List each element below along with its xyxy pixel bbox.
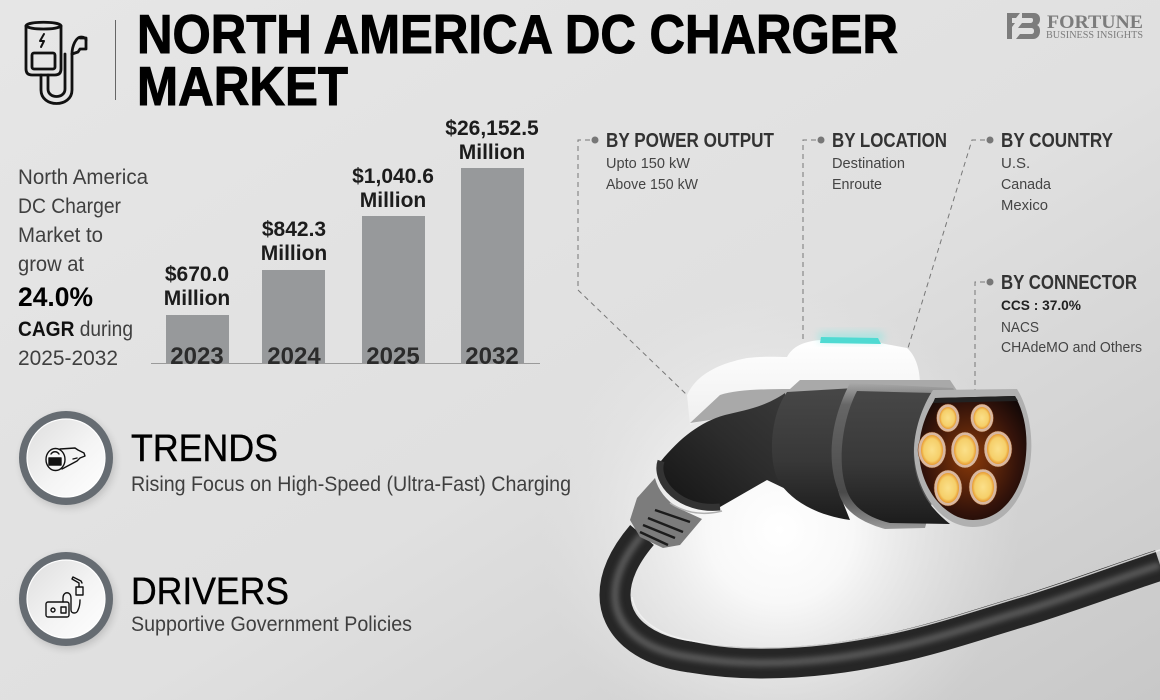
- segment: by location: Destination: [832, 155, 905, 172]
- bar: 2025: $1,040.6: [352, 165, 434, 188]
- icon: car charger button: [19, 411, 115, 508]
- segment: by location: Enroute: [832, 176, 882, 193]
- logo: Fortune Business Insights: BUSINESS INSIGHTS: [1046, 30, 1143, 41]
- text: growth statement: 2025-2032: [18, 347, 118, 370]
- bar: 2024: Million: [261, 242, 327, 265]
- icon: charger button: [19, 552, 115, 649]
- leader lines: [578, 140, 985, 395]
- segment: by connector: CCS : 37.0%: [1001, 297, 1082, 313]
- text: growth statement: 24.0%: [18, 282, 93, 312]
- ribbed strain relief: [630, 478, 702, 548]
- segment: by location: BY LOCATION: [832, 130, 947, 152]
- pins: [918, 404, 1012, 506]
- rear body: [772, 388, 855, 520]
- segment: by connector: CHAdeMO and Others: [1001, 339, 1142, 356]
- silver trim: [690, 380, 958, 423]
- segment: by power output: Upto 150 kW: [606, 155, 691, 172]
- bar: 2032: $26,152.5: [445, 117, 539, 140]
- title: NORTH AMERICA DC CHARGER: [137, 3, 898, 65]
- segment: by connector: BY CONNECTOR: [1001, 272, 1137, 294]
- text: growth statement: DC Charger: [18, 195, 121, 218]
- segment: by country: U.S.: [1001, 155, 1030, 172]
- panel: trends: Rising Focus on High-Speed (Ultra-Fast) Charging: [131, 473, 571, 496]
- illustration: DC charger plug and cable: [615, 332, 1160, 663]
- text: growth statement: Market to: [18, 224, 103, 247]
- icon: charging station: [26, 22, 86, 104]
- panel: drivers: DRIVERS: [131, 571, 289, 613]
- text: growth statement: CAGR during: [18, 318, 133, 341]
- logo: Fortune Business Insights: FORTUNE: [1047, 12, 1143, 33]
- bar: 2024: 2024: [267, 343, 321, 370]
- segment: by power output: [592, 130, 774, 193]
- bar: 2023: $670.0: [165, 263, 229, 286]
- bar: 2032: 2032: [465, 343, 519, 370]
- cable: [615, 535, 1160, 663]
- bar: 2024: [261, 218, 327, 370]
- title: [137, 3, 898, 117]
- segment: by power output: Above 150 kW: [606, 176, 699, 193]
- collar: [660, 461, 722, 513]
- bar chart: [151, 117, 540, 370]
- front barrel: [842, 391, 950, 524]
- logo: Fortune Business Insights: [1007, 12, 1143, 41]
- divider: [115, 20, 116, 100]
- segment: by connector: NACS: [1001, 319, 1039, 336]
- segment: by country: [986, 130, 1114, 214]
- white housing: [687, 340, 920, 425]
- bar: 2032: Million: [459, 141, 525, 164]
- bar: 2024: $842.3: [262, 218, 326, 241]
- bar: 2023: Million: [164, 287, 230, 310]
- bar: 2032: [445, 117, 539, 370]
- text: growth statement: North America: [18, 166, 148, 189]
- lip: [832, 383, 960, 529]
- bar: 2025: Million: [360, 189, 426, 212]
- text: growth statement: grow at: [18, 253, 84, 276]
- face: [914, 389, 1031, 527]
- bar: 2023: [164, 263, 230, 370]
- text: growth statement: [18, 166, 148, 370]
- segment: by country: Canada: [1001, 176, 1052, 193]
- segment: by country: Mexico: [1001, 197, 1048, 214]
- status light: [818, 332, 884, 344]
- segment: by location: [818, 130, 947, 193]
- segment: by country: BY COUNTRY: [1001, 130, 1114, 152]
- bar: 2023: 2023: [170, 343, 224, 370]
- panel: drivers: Supportive Government Policies: [131, 613, 412, 636]
- segment: by connector: [986, 272, 1142, 356]
- panel: trends: [19, 411, 571, 508]
- bar: 2025: [352, 165, 434, 370]
- bar: 2025: 2025: [366, 343, 420, 370]
- panel: trends: TRENDS: [131, 428, 278, 470]
- title: MARKET: [137, 55, 348, 117]
- segment: by power output: BY POWER OUTPUT: [606, 130, 774, 152]
- neck: [660, 393, 792, 507]
- panel: drivers: [19, 552, 412, 649]
